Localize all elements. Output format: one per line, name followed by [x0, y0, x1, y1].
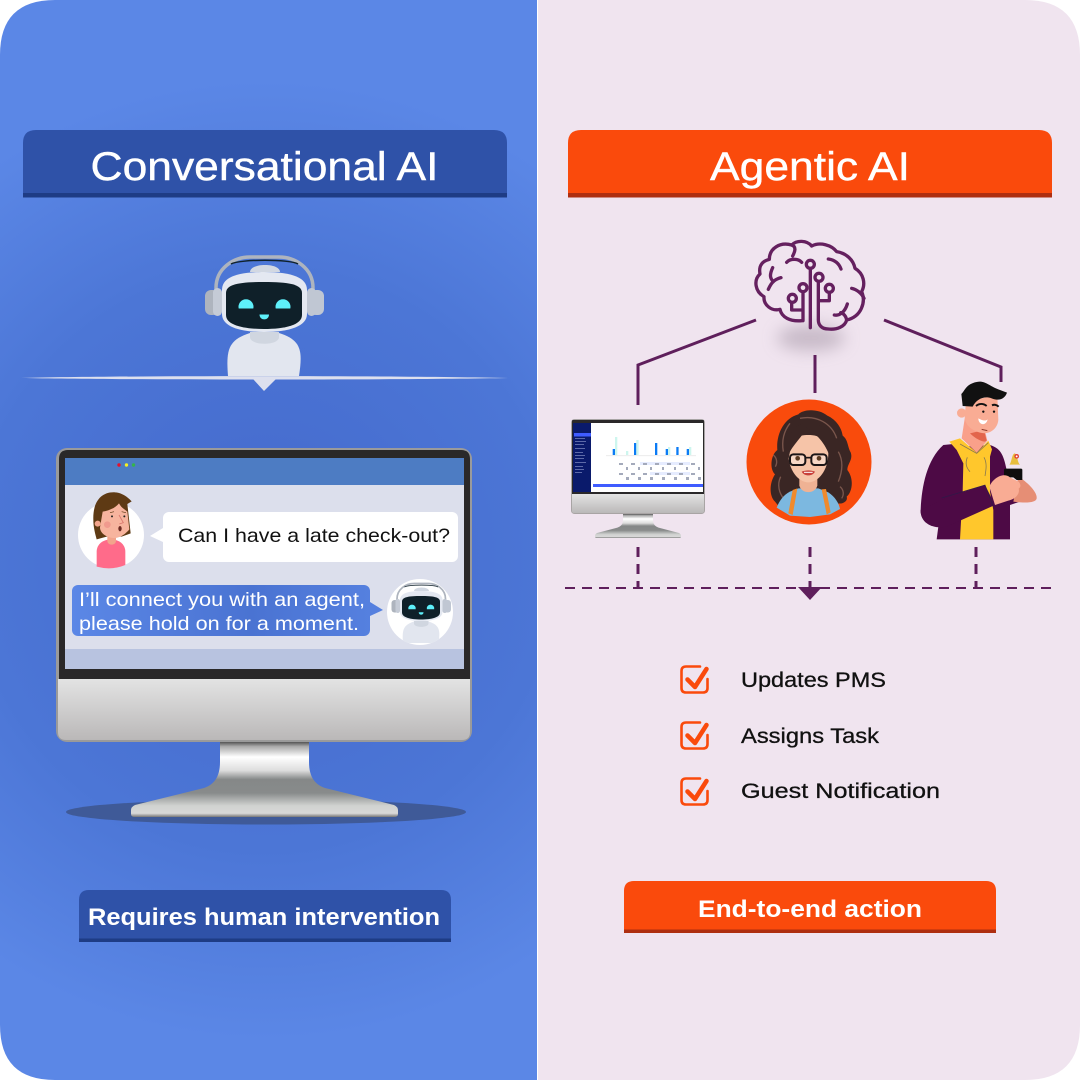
monitor bezel [59, 450, 470, 679]
monitor: chat window [56, 448, 472, 824]
connector: brain to guest [884, 320, 1001, 382]
icon: dashboard monitor [571, 419, 705, 538]
jacket [921, 444, 1020, 539]
avatar: guest [78, 492, 144, 568]
avatar: chat robot [387, 579, 453, 645]
avatar: staff member [746, 400, 872, 524]
connector: dashed outputs [638, 547, 976, 590]
chat bubble: bot reply: I’ll connect you with an agent, [79, 589, 365, 611]
illustration: guest with phone [921, 382, 1037, 539]
phone [1004, 469, 1022, 480]
monitor chin [58, 679, 470, 740]
item: Guest Notification: Guest Notification [741, 779, 940, 803]
sleeve [921, 485, 995, 527]
chat bubble: guest question [150, 512, 458, 562]
face [965, 395, 998, 433]
arrow: down to checklist [798, 587, 822, 600]
monitor body [56, 448, 472, 742]
shirt [949, 438, 993, 539]
item: Guest Notification [682, 778, 940, 804]
item: Assigns Task: Assigns Task [741, 724, 879, 748]
chat bubble: guest question: Can I have a late check-out? [178, 525, 450, 547]
panel: Conversational AI background [0, 0, 537, 1080]
window title bar [65, 458, 464, 485]
item: Assigns Task [682, 722, 879, 748]
chat bubble: bot reply [72, 585, 383, 636]
divider line with pointer [21, 376, 508, 391]
label: Requires human intervention [79, 890, 451, 942]
connector: dashed horizontal line [565, 587, 1058, 589]
monitor stand [131, 742, 398, 817]
collar wires [960, 443, 988, 476]
checklist [682, 666, 940, 804]
item: Updates PMS [682, 666, 886, 692]
monitor foot shadow [66, 800, 466, 824]
connector: brain to dashboard [638, 320, 756, 405]
panel: Agentic AI background [538, 0, 1080, 1080]
screen background [65, 458, 464, 669]
chat bubble: bot reply: please hold on for a moment. [79, 613, 359, 635]
notification bell [1009, 453, 1020, 465]
neck [962, 417, 987, 453]
front hand [989, 475, 1020, 505]
heading: Conversational AI: Conversational AI [90, 145, 438, 189]
heading: Conversational AI [23, 130, 507, 198]
label: End-to-end action: End-to-end action [698, 896, 922, 923]
connector: brain to staff [814, 355, 816, 393]
label: Requires human intervention: Requires human intervention [88, 904, 440, 931]
back hand [1013, 477, 1037, 503]
window footer band [65, 649, 464, 669]
label: End-to-end action [624, 881, 996, 933]
icon: robot with headset [205, 257, 324, 376]
item: Updates PMS: Updates PMS [741, 668, 886, 692]
heading: Agentic AI: Agentic AI [710, 145, 910, 189]
heading: Agentic AI [568, 130, 1052, 198]
icon: brain circuit [756, 241, 864, 351]
hair [961, 382, 1007, 407]
